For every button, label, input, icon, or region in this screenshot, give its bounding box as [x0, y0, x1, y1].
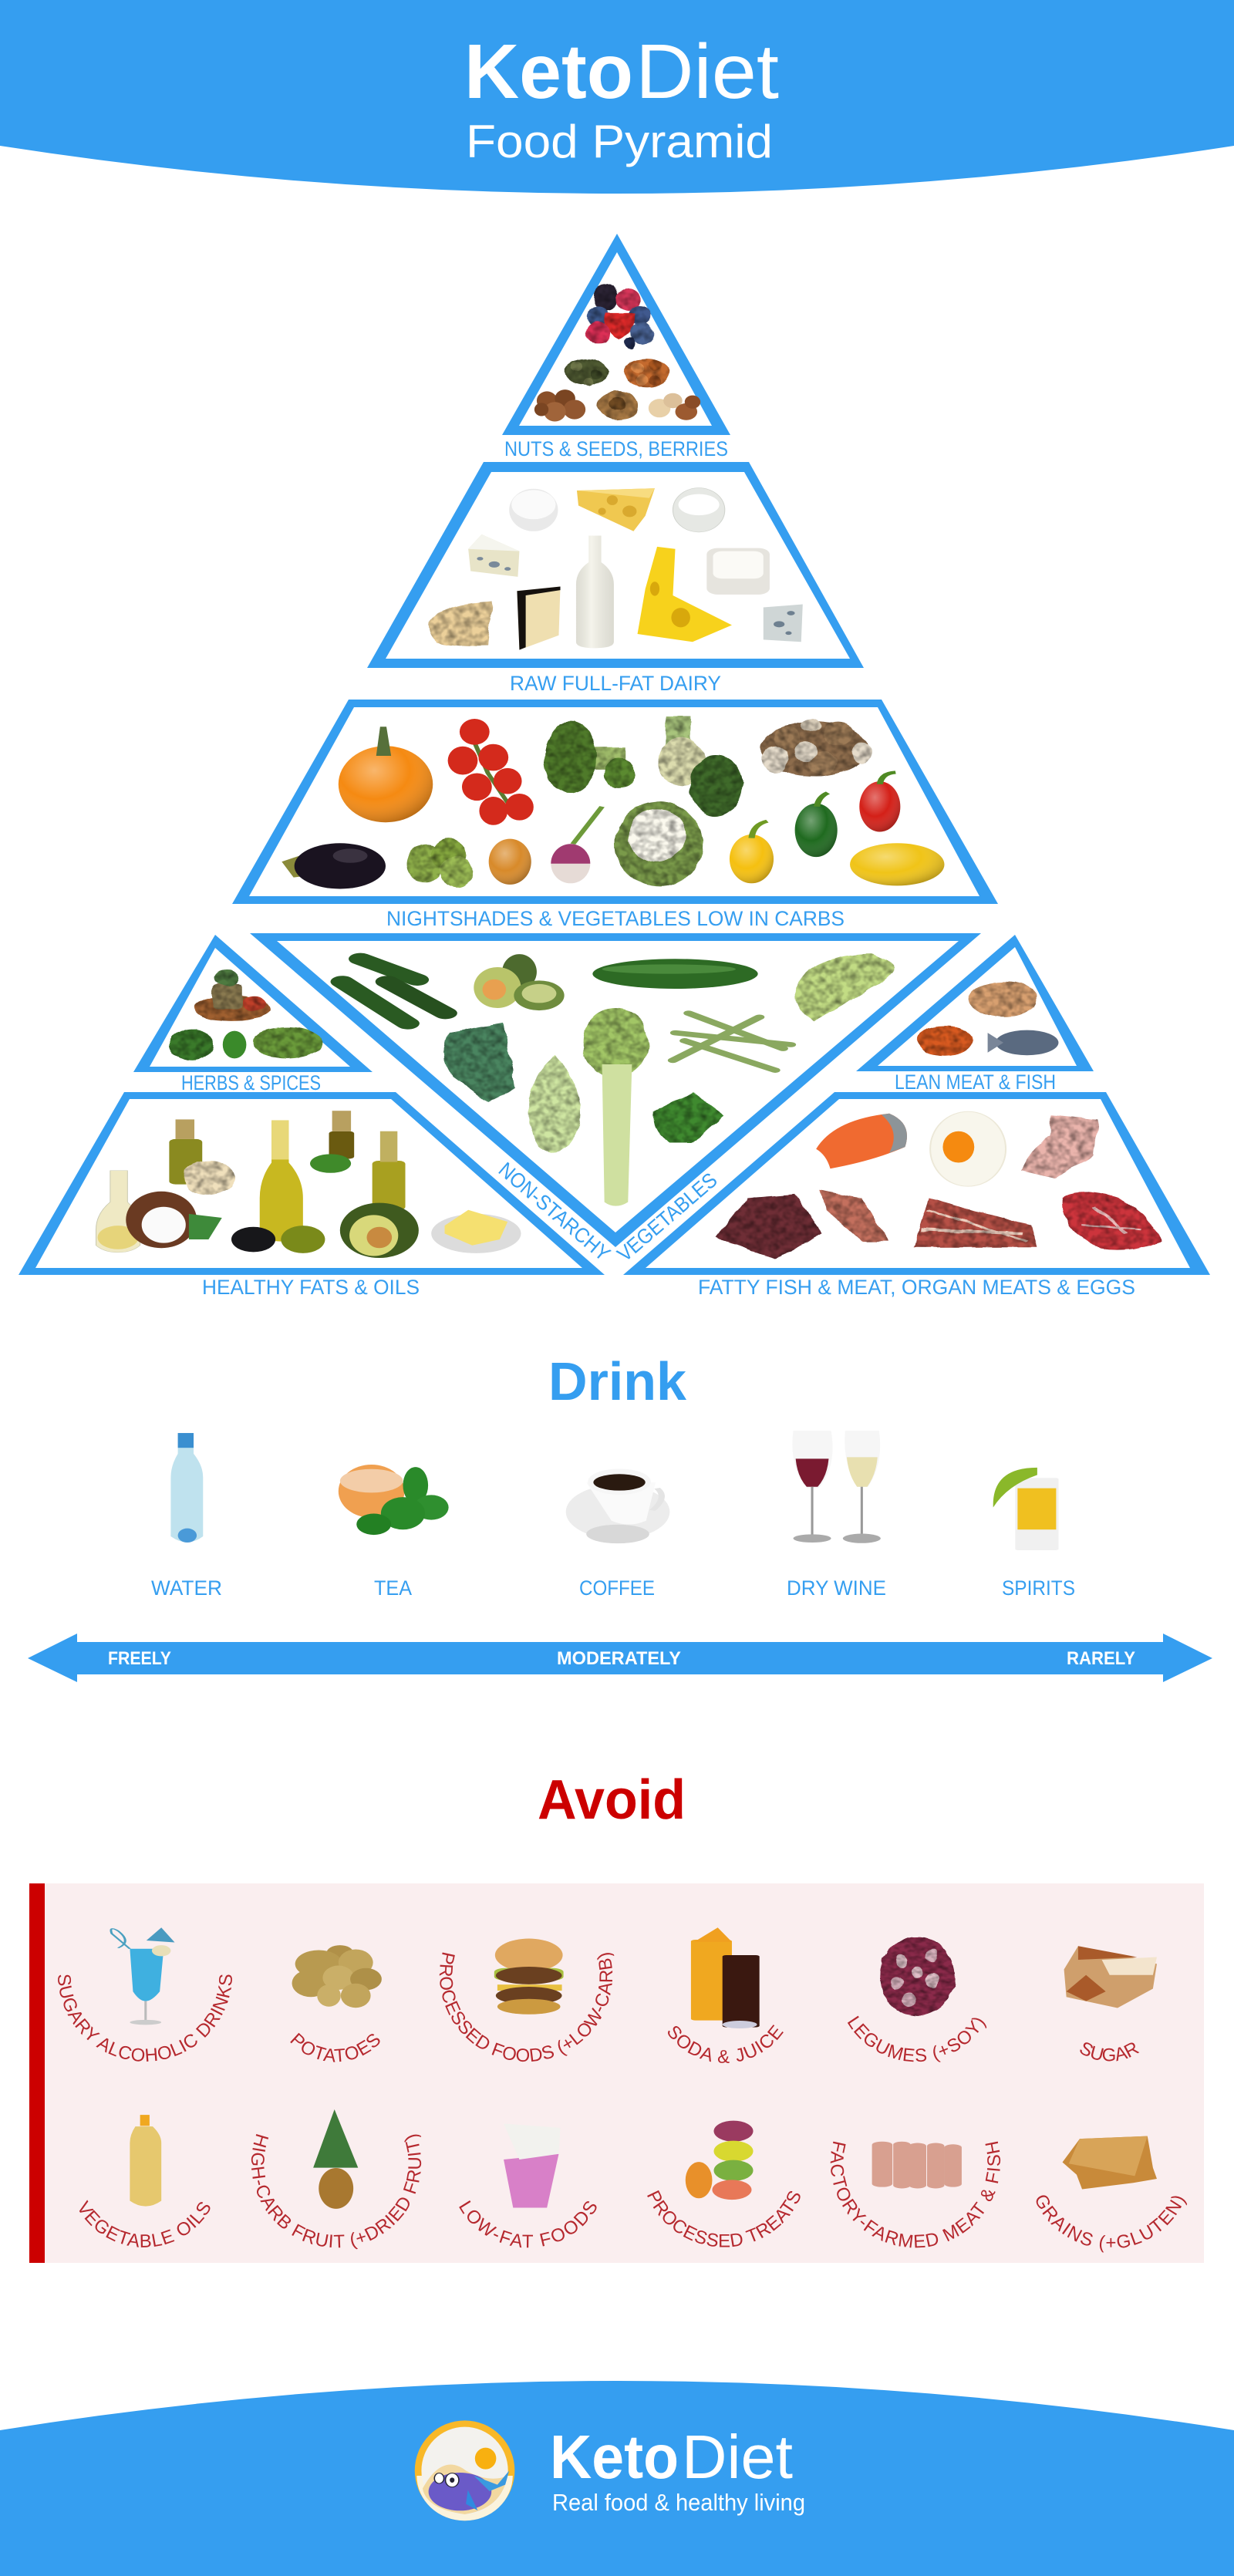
subtitle: Food Pyramid: Food Pyramid: [466, 116, 773, 167]
icon: eggplant: [282, 843, 386, 888]
label: potatoes: POTATOES: [290, 2033, 379, 2062]
pyramid tier: fatty fish, meat, organ meats and eggs: [623, 1092, 1210, 1299]
icon: yogurt cup: [504, 2124, 561, 2207]
icon: olives: [231, 1226, 325, 1253]
icon: pumpkin seeds: [564, 359, 609, 386]
icon: vegetable oil bottle: [130, 2115, 161, 2207]
icon: round white cheese: [509, 489, 558, 531]
foods: fats and oils: [96, 1111, 521, 1258]
icon: green cabbage leaves: [652, 1092, 724, 1143]
icon: fish: [988, 1030, 1058, 1055]
triangle frame: [133, 935, 373, 1072]
pyramid tier: nuts, seeds and berries: [502, 234, 730, 460]
brand name: KetoDiet: Keto: [550, 2423, 679, 2491]
icon: avocado: [340, 1203, 419, 1258]
icon: liver: [716, 1194, 822, 1259]
icon: yellow cheese wedge: [577, 488, 655, 531]
icon: tomatoes on the vine: [448, 719, 534, 825]
icon: small oil bottle and basil: [310, 1111, 354, 1173]
icon: oil cruet: [96, 1171, 140, 1253]
label: rarely: RARELY: [1067, 1648, 1135, 1669]
tagline: Real food & healthy living: [552, 2489, 805, 2516]
foods: vegetables: [282, 716, 944, 888]
panel: drinks: [151, 1431, 1075, 1600]
icon: brussels sprouts: [406, 838, 472, 887]
icon: pork chop: [1021, 1114, 1097, 1178]
label: nightshades and vegetables low in carbs: NIGHTSHADES & VEGETABLES LOW IN CARBS: [386, 907, 845, 930]
trapezoid frame: [367, 462, 864, 668]
icon: black rind cheese: [517, 587, 561, 650]
icon: tall oil carafe: [260, 1120, 303, 1242]
accent bar: [29, 1883, 45, 2263]
icon: parsley: [170, 1029, 213, 1060]
icon: celeriac with leaves: [658, 716, 743, 817]
label: low-fat foods: LOW-FAT FOODS: [459, 2200, 597, 2247]
pyramid tier: non-starchy vegetables: [250, 933, 981, 1266]
pyramid tier: healthy fats and oils: [19, 1092, 605, 1299]
icon: asparagus: [673, 1013, 791, 1071]
icon: mixed nuts: [649, 393, 700, 420]
pyramid tier: lean meat and fish: [856, 935, 1094, 1094]
icon: toast: [1063, 2136, 1157, 2190]
icon: macadamia nuts: [183, 1160, 234, 1195]
icon: tea cup with mint: [339, 1465, 449, 1535]
icon: blue cocktail: [111, 1927, 175, 2025]
heading: Avoid: Avoid: [538, 1769, 686, 1831]
label: nuts and seeds, berries: NUTS & SEEDS, BERRIES: [504, 437, 728, 460]
icon: kidney beans: [879, 1937, 955, 2016]
icon: cream cheese tub: [706, 548, 770, 595]
avoid food images: [111, 1927, 1157, 2209]
title: KetoDiet: Keto: [464, 29, 633, 115]
icon: sausages: [872, 2142, 962, 2188]
label: non-starchy: NON-STARCHY: [494, 1158, 615, 1266]
label: spirits: SPIRITS: [1002, 1576, 1075, 1600]
icon: yellow bell pepper: [730, 821, 774, 883]
icon: avocado halves: [474, 954, 565, 1010]
icon: basil: [223, 1031, 246, 1058]
icon: olive oil bottle: [169, 1119, 202, 1185]
icon: burger: [494, 1939, 564, 2015]
icon: coffee cup and saucer: [566, 1468, 669, 1543]
label: fatty fish and meat, organ meats and eggs: FATTY FISH & MEAT, ORGAN MEATS & EGGS: [698, 1276, 1135, 1299]
foods: non-starchy vegetables: [342, 954, 894, 1206]
panel: foods to avoid: [29, 1883, 1204, 2263]
inverted triangle frame: [250, 933, 981, 1247]
label: legumes: LEGUMES (+SOY): [847, 2016, 987, 2062]
icon: chicken drumsticks: [969, 981, 1037, 1017]
icon: white wine glass: [843, 1431, 881, 1543]
icon: bacon: [913, 1198, 1037, 1247]
icon: steak: [1062, 1192, 1161, 1250]
brand name: KetoDiet: [550, 2423, 793, 2491]
label: vegetables: VEGETABLES: [613, 1168, 722, 1266]
icon: romaine lettuce: [797, 954, 894, 1021]
icon: cucumber: [592, 959, 758, 989]
label: coffee: COFFEE: [579, 1576, 655, 1600]
label: moderately: MODERATELY: [557, 1648, 681, 1669]
title: KetoDiet: Diet: [636, 29, 779, 115]
icon: red bell pepper: [859, 772, 900, 831]
icon: soda and juice: [691, 1927, 760, 2028]
label: dry wine: DRY WINE: [787, 1576, 886, 1600]
label: tea: TEA: [374, 1576, 412, 1600]
triangle frame: [502, 234, 730, 435]
label: grains: GRAINS (+GLUTEN): [1037, 2195, 1188, 2252]
icon: mortar and spices: [194, 970, 270, 1021]
icon: dill: [253, 1027, 322, 1058]
pyramid tier: nightshades and low-carb vegetables: [232, 700, 998, 930]
icon: fried egg: [930, 1111, 1006, 1186]
trapezoid frame: [232, 700, 998, 904]
icon: onion: [489, 839, 531, 885]
icon: coconut: [126, 1192, 222, 1248]
label: processed foods: PROCESSED FOODS (+LOW-CARB): [440, 1953, 614, 2062]
label: water: WATER: [151, 1576, 222, 1600]
arrow: frequency scale: [28, 1634, 1212, 1682]
foods: herbs and spices: [170, 970, 322, 1060]
label: healthy fats and oils: HEALTHY FATS & OILS: [202, 1276, 420, 1299]
icon: turnip: [551, 807, 602, 883]
triangle frame: [856, 935, 1094, 1071]
icon: pineapple: [313, 2109, 358, 2209]
icon: crab: [916, 1026, 973, 1056]
icon: broccoli: [545, 721, 636, 794]
label: sugar: SUGAR: [1080, 2042, 1140, 2061]
icon: olive oil bottle right: [373, 1131, 406, 1210]
icon: zucchini: [342, 959, 446, 1023]
label: high-carb fruit: HIGH-CARB FRUIT (+DRIED FRUIT): [251, 2134, 421, 2249]
icon: swiss cheese: [638, 547, 732, 642]
pyramid tier: herbs and spices: [133, 935, 373, 1094]
icon: celery: [582, 1008, 649, 1206]
foods: dairy: [429, 488, 803, 650]
icon: collard greens: [443, 1023, 515, 1101]
label: processed treats: PROCESSED TREATS: [647, 2190, 801, 2247]
trapezoid frame: [623, 1092, 1210, 1275]
heading: Drink: Drink: [548, 1351, 686, 1411]
icon: butter on dish: [431, 1210, 521, 1253]
foods: nuts, seeds and berries: [534, 284, 700, 421]
icon: water bottle: [170, 1433, 203, 1543]
icon: potatoes: [292, 1945, 382, 2008]
trapezoid frame: [19, 1092, 605, 1275]
label: lean meat and fish: LEAN MEAT & FISH: [895, 1071, 1056, 1094]
icon: walnuts: [597, 391, 639, 420]
icon: blue cheese wedge: [468, 534, 519, 577]
icon: cauliflower: [615, 801, 703, 886]
title: KetoDiet: [464, 29, 779, 115]
drink images: [170, 1431, 1058, 1550]
pyramid tier: raw full-fat dairy: [367, 462, 864, 695]
icon: pumpkin: [339, 727, 433, 822]
icon: milk bottle: [576, 536, 614, 648]
icon: spaghetti squash: [850, 843, 944, 885]
label: vegetable oils: VEGETABLE OILS: [79, 2200, 210, 2247]
icon: blue cheese slab: [764, 605, 803, 642]
foods: meat and fish: [716, 1111, 1161, 1259]
icon: salmon steak: [816, 1114, 907, 1168]
icon: spirit shot with lime: [993, 1468, 1058, 1550]
label: freely: FREELY: [108, 1648, 171, 1669]
icon: hazelnuts: [534, 389, 585, 421]
icon: heart: [820, 1190, 889, 1242]
logo: fish and egg: [415, 2420, 514, 2520]
icon: green bell pepper: [795, 793, 838, 857]
icon: macarons: [686, 2121, 754, 2200]
icon: red wine glass: [792, 1431, 833, 1543]
icon: berries: [585, 284, 653, 349]
icon: almonds: [624, 359, 669, 387]
icon: sugar crystals: [1064, 1946, 1157, 2008]
foods: lean meat and fish: [916, 981, 1058, 1056]
footer banner: [0, 2381, 1234, 2576]
label: soda and juice: SODA & JUICE: [668, 2025, 784, 2063]
icon: camembert: [429, 601, 492, 646]
icon: mushrooms: [761, 719, 872, 777]
label: sugary alcoholic drinks: SUGARY ALCOHOLIC DRINKS: [58, 1974, 232, 2062]
header banner: [0, 0, 1234, 194]
label: raw full-fat dairy: RAW FULL-FAT DAIRY: [510, 672, 721, 695]
label: herbs and spices: HERBS & SPICES: [181, 1071, 321, 1094]
label: factory-farmed meat and fish: FACTORY-FARMED MEAT & FISH: [830, 2141, 1001, 2247]
brand name: KetoDiet: Diet: [682, 2423, 793, 2491]
icon: napa cabbage: [529, 1056, 580, 1153]
icon: bowl of cream: [673, 488, 725, 532]
